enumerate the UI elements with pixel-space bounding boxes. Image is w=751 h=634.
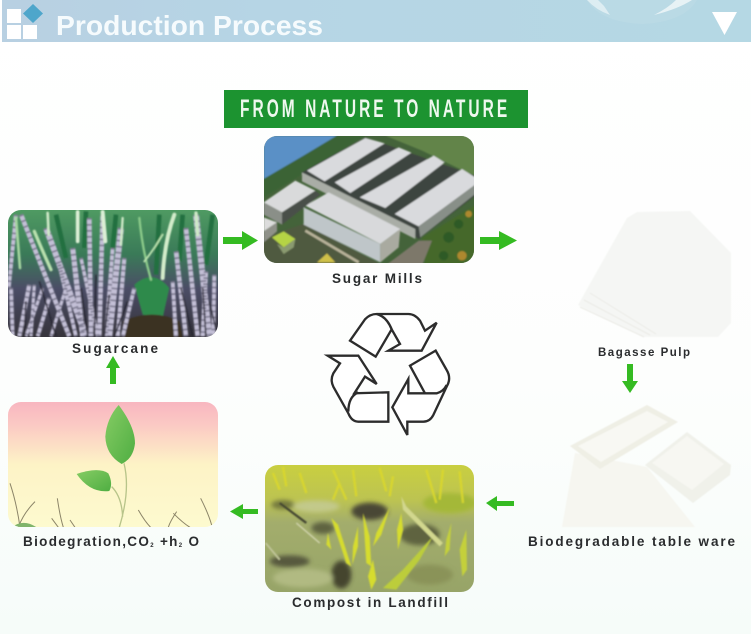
panel: compost in landfill photo [265,465,476,592]
label: sugarcane: Sugarcane [72,341,158,356]
icon: down triangle [712,12,737,35]
label: compost in landfill: Compost in Landfill [292,595,448,610]
label: biodegration co2 h2o: Biodegration,CO [23,534,149,549]
banner: from nature to nature: FROM NATURE TO NATURE [240,95,507,123]
label: biodegration co2 h2o: 2 [179,543,183,549]
arrow: table ware to compost [486,496,514,511]
label: biodegration co2 h2o: +h [155,534,177,549]
label: biodegradable table ware: Biodegradable table ware [528,534,735,549]
label: bagasse pulp: Bagasse Pulp [598,347,690,359]
panel: biodegradable table ware [562,405,731,527]
icon: upper leaf [105,405,135,464]
icon: lower leaf [77,470,111,491]
arrow: biodegradation to sugarcane [106,356,120,384]
arrow: mills to pulp [480,231,517,250]
icon: bubble [587,0,697,24]
icon: header squares and diamond [7,4,43,39]
icon: sprout stem [112,463,126,527]
arrow: sugarcane to mills [223,231,258,250]
label: biodegration co2 h2o: 2 [150,543,154,549]
panel: bagasse pulp sheets [578,211,731,337]
label: sugar mills: Sugar Mills [332,271,422,286]
header bar [2,0,751,42]
label: biodegration co2 h2o: O [183,534,199,549]
panel: sugar mills photo [264,136,477,267]
header title: Production Process [56,10,323,41]
panel: sugarcane photo [8,210,218,338]
banner: from nature to nature [224,90,528,128]
panel: biodegradation leaf illustration [8,402,218,527]
arrow: pulp to table ware [622,364,638,393]
arrow: compost to biodegradation [230,504,258,519]
icon: recycling symbol [328,314,449,435]
